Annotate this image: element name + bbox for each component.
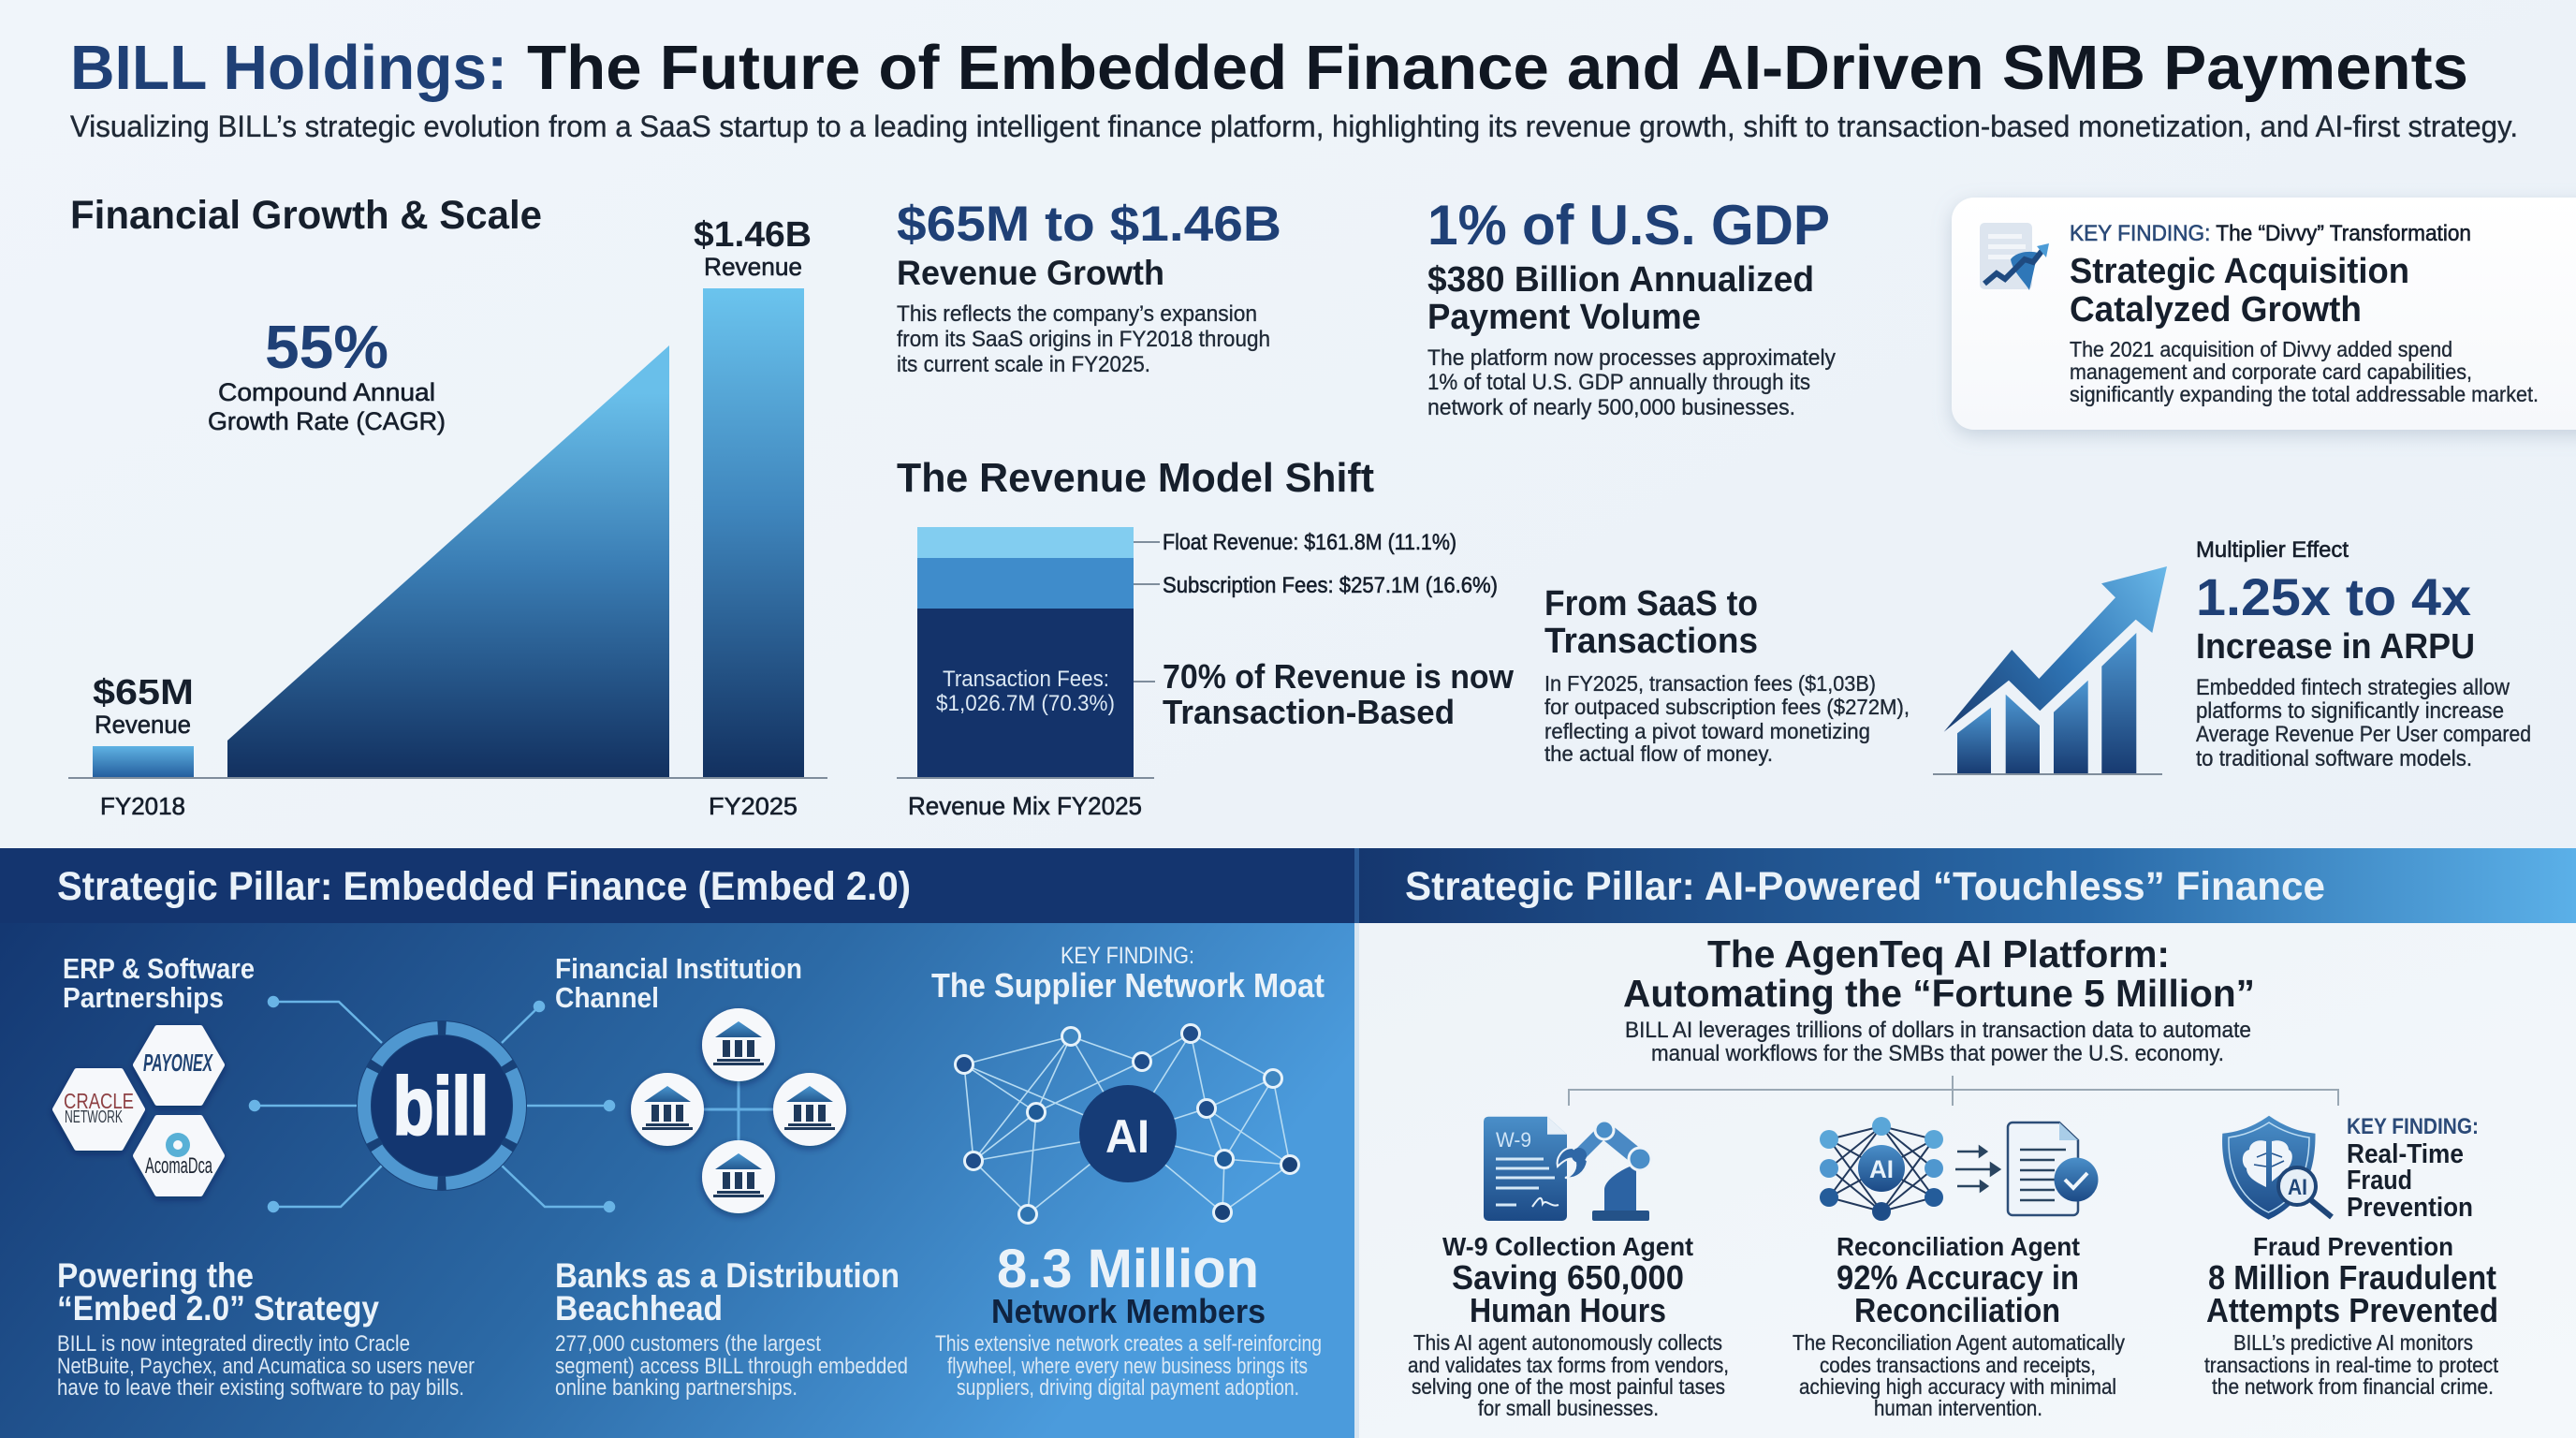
text block: Embed 2.0 strategy: “Embed 2.0” Strategy	[57, 1289, 379, 1328]
agent: W-9 collection	[1408, 1232, 1729, 1420]
panel: financial growth and scale	[68, 193, 827, 820]
icon: document with growth arrow	[1980, 223, 2049, 290]
agent: W-9 collection: and validates tax forms from vendors,	[1408, 1353, 1729, 1377]
heading: AgenTeq platform	[1623, 932, 2255, 1066]
key finding: real-time fraud: Prevention	[2347, 1193, 2473, 1223]
panel: Divvy key finding card	[1952, 198, 2576, 430]
agent: W-9 collection: for small businesses.	[1478, 1396, 1659, 1420]
agent: reconciliation	[1793, 1232, 2125, 1420]
stat: revenue growth: from its SaaS origins in FY2018 through	[897, 327, 1270, 352]
icon: rising bars with arrow	[1933, 566, 2167, 774]
icon: partner hexagons: AcomaDca	[145, 1153, 212, 1179]
label: ERP and software: ERP & Software	[63, 952, 255, 985]
text block: Embed 2.0 strategy: BILL is now integrated directly into Cracle	[57, 1331, 410, 1357]
connectors: hub lines	[250, 997, 614, 1211]
panel: Divvy key finding card: significantly expanding the total addressable market.	[2070, 382, 2539, 406]
stat: multiplier effect: 1.25x to 4x	[2196, 567, 2471, 626]
text block: from SaaS to transactions: Transactions	[1544, 622, 1758, 661]
stat: revenue growth	[897, 197, 1281, 377]
callout: CAGR	[208, 313, 446, 435]
agent: W-9 collection: selving one of the most painful tases	[1412, 1374, 1725, 1399]
callout: CAGR: Compound Annual	[218, 378, 435, 406]
panel: embedded finance pillar	[0, 848, 1359, 1438]
text block: banks as beachhead: Banks as a Distribution	[555, 1256, 900, 1295]
header: embedded finance: Strategic Pillar: Embedded Finance (Embed 2.0)	[57, 864, 911, 909]
agent: fraud prevention	[2204, 1232, 2499, 1399]
panel: Divvy key finding card: KEY FINDING: The “Divvy” Transformation	[2070, 221, 2471, 246]
text block: banks as beachhead: Beachhead	[555, 1289, 723, 1328]
agent: fraud prevention: the network from financial crime.	[2212, 1374, 2494, 1399]
agent: reconciliation: Reconciliation Agent	[1837, 1232, 2080, 1261]
stat: revenue growth: its current scale in FY2025.	[897, 352, 1150, 377]
icon: partner hexagons: CRACLE	[64, 1089, 134, 1113]
chart: supplier network graph: AI	[1105, 1110, 1149, 1163]
stat: multiplier effect: to traditional software models.	[2196, 746, 2472, 771]
stat: network members: suppliers, driving digital payment adoption.	[957, 1375, 1299, 1401]
stat: share of GDP	[1427, 194, 1836, 420]
stat: share of GDP: The platform now processes approximately	[1427, 345, 1836, 371]
text block: banks as beachhead: segment) access BILL through embedded	[555, 1354, 908, 1379]
chart: revenue growth bars: Revenue	[704, 253, 802, 281]
icon: W-9 robot arm: W-9	[1496, 1128, 1531, 1152]
chart: stacked revenue mix: $1,026.7M (70.3%)	[936, 691, 1115, 716]
icon: AI fraud shield	[2222, 1116, 2332, 1220]
text block: from SaaS to transactions: for outpaced subscription fees ($272M),	[1544, 695, 1910, 719]
panel: AI-powered finance pillar	[1359, 848, 2576, 1438]
header: AI-powered finance: Strategic Pillar: AI-Powered “Touchless” Finance	[1405, 864, 2325, 909]
heading: supplier network key finding: KEY FINDING:	[1061, 943, 1194, 969]
key finding: real-time fraud: KEY FINDING:	[2347, 1114, 2479, 1139]
connector: agent tree	[1569, 1076, 2338, 1106]
chart: stacked revenue mix: Float Revenue: $161.8M (11.1%)	[1163, 530, 1456, 555]
chart: supplier network graph	[955, 1024, 1299, 1223]
icon: bill hub	[357, 1020, 527, 1191]
text block: Embed 2.0 strategy: NetBuite, Paychex, and Acumatica so users never	[57, 1354, 475, 1379]
icon: partner hexagons: PAYONEX	[143, 1049, 213, 1077]
icon: bank network	[631, 1008, 846, 1213]
icon: AI fraud shield: AI	[2288, 1175, 2307, 1200]
header: AI-powered finance	[1359, 848, 2576, 923]
label: ERP and software	[63, 952, 255, 1014]
label: financial institution channel	[555, 952, 802, 1014]
stat: multiplier effect: Increase in ARPU	[2196, 627, 2475, 667]
label: ERP and software: Partnerships	[63, 981, 224, 1014]
stat: network members: flywheel, where every new business brings its	[947, 1354, 1308, 1379]
text block: banks as beachhead: 277,000 customers (the largest	[555, 1331, 821, 1357]
chart: revenue growth bars: FY2025	[709, 792, 798, 820]
chart: revenue growth bars	[68, 215, 827, 820]
agent: fraud prevention: 8 Million Fraudulent	[2208, 1258, 2496, 1297]
stat: multiplier effect	[2196, 537, 2531, 771]
stat: share of GDP: Payment Volume	[1427, 298, 1701, 337]
text block: from SaaS to transactions: reflecting a pivot toward monetizing	[1544, 719, 1870, 743]
icon: bill hub: bill	[393, 1062, 489, 1152]
chart: stacked revenue mix: Revenue Mix FY2025	[908, 792, 1142, 820]
stat: share of GDP: $380 Billion Annualized	[1427, 260, 1814, 300]
agent: fraud prevention: Attempts Prevented	[2206, 1291, 2498, 1329]
stat: share of GDP: network of nearly 500,000 businesses.	[1427, 395, 1795, 420]
agent: W-9 collection: W-9 Collection Agent	[1442, 1232, 1693, 1261]
heading: supplier network key finding: The Supplier Network Moat	[931, 966, 1325, 1005]
stat: revenue growth: Revenue Growth	[897, 254, 1164, 292]
panel: Divvy key finding card: The 2021 acquisition of Divvy added spend	[2070, 337, 2452, 361]
panel: Divvy key finding card: management and corporate card capabilities,	[2070, 360, 2472, 384]
chart: stacked revenue mix	[897, 527, 1515, 820]
key finding: real-time fraud: Fraud	[2347, 1166, 2412, 1196]
agent: reconciliation: codes transactions and receipts,	[1820, 1353, 2096, 1377]
stat: revenue growth: This reflects the company’s expansion	[897, 301, 1257, 327]
agent: W-9 collection: This AI agent autonomously collects	[1413, 1330, 1722, 1355]
heading: AgenTeq platform: manual workflows for the SMBs that power the U.S. economy.	[1651, 1041, 2224, 1066]
heading: revenue model shift: The Revenue Model Shift	[897, 455, 1374, 501]
stat: network members	[935, 1239, 1322, 1401]
icon: AI reconciliation: AI	[1869, 1155, 1894, 1183]
chart: stacked revenue mix: Subscription Fees: $257.1M (16.6%)	[1163, 573, 1498, 598]
chart: stacked revenue mix: Transaction Fees:	[943, 667, 1109, 692]
chart: stacked revenue mix: Transaction-Based	[1163, 693, 1455, 731]
panel: Divvy key finding card: Strategic Acquisition	[2070, 252, 2409, 291]
heading: AgenTeq platform: Automating the “Fortune 5 Million”	[1623, 972, 2255, 1015]
text block: from SaaS to transactions	[1544, 584, 1910, 766]
chart: revenue growth bars: $65M	[93, 673, 194, 712]
text block: from SaaS to transactions: From SaaS to	[1544, 584, 1758, 624]
title: BILL Holdings:	[70, 33, 507, 103]
agent: W-9 collection: Saving 650,000	[1452, 1258, 1684, 1297]
label: financial institution channel: Channel	[555, 981, 659, 1014]
icon: W-9 robot arm	[1484, 1117, 1651, 1221]
callout: CAGR: 55%	[265, 313, 388, 381]
icon: partner hexagons	[55, 1028, 222, 1194]
stat: share of GDP: 1% of U.S. GDP	[1427, 194, 1830, 257]
chart: revenue growth bars: Revenue	[95, 711, 191, 739]
stat: multiplier effect: Embedded fintech strategies allow	[2196, 675, 2510, 700]
label: financial institution channel: Financial Institution	[555, 952, 802, 985]
stat: network members: Network Members	[991, 1292, 1266, 1330]
icon: partner hexagons: NETWORK	[65, 1108, 123, 1126]
key finding: real-time fraud	[2347, 1114, 2479, 1223]
key finding: real-time fraud: Real-Time	[2347, 1139, 2464, 1169]
subtitle: Visualizing BILL’s strategic evolution from a SaaS startup to a leading intelligent finance platform, highlighting its revenue growth, shift to transaction-based monetization, and AI-first strategy.	[70, 110, 2518, 143]
text block: Embed 2.0 strategy: Powering the	[57, 1256, 254, 1295]
agent: reconciliation: human intervention.	[1874, 1396, 2042, 1420]
panel: Divvy key finding card: Catalyzed Growth	[2070, 290, 2362, 330]
heading: supplier network key finding	[931, 943, 1325, 1005]
heading: financial growth: Financial Growth & Scale	[70, 193, 542, 238]
text block: banks as beachhead: online banking partnerships.	[555, 1375, 798, 1401]
heading: AgenTeq platform: BILL AI leverages trillions of dollars in transaction data to automate	[1625, 1018, 2251, 1043]
text block: Embed 2.0 strategy	[57, 1256, 475, 1401]
title: The Future of Embedded Finance and AI-Driven SMB Payments	[527, 33, 2468, 103]
stat: network members: This extensive network creates a self-reinforcing	[935, 1331, 1322, 1357]
agent: reconciliation: The Reconciliation Agent automatically	[1793, 1330, 2125, 1355]
agent: W-9 collection: Human Hours	[1470, 1291, 1666, 1329]
stat: network members: 8.3 Million	[997, 1239, 1259, 1299]
agent: reconciliation: 92% Accuracy in	[1837, 1258, 2079, 1297]
text block: from SaaS to transactions: the actual flow of money.	[1544, 741, 1773, 766]
agent: reconciliation: Reconciliation	[1854, 1291, 2060, 1329]
stat: multiplier effect: platforms to significantly increase	[2196, 698, 2504, 724]
callout: CAGR: Growth Rate (CAGR)	[208, 407, 446, 435]
stat: multiplier effect: Average Revenue Per User compared	[2196, 722, 2531, 747]
agent: reconciliation: achieving high accuracy with minimal	[1799, 1374, 2116, 1399]
chart: revenue growth bars: FY2018	[100, 792, 185, 820]
agent: fraud prevention: BILL’s predictive AI monitors	[2233, 1330, 2473, 1355]
stat: revenue growth: $65M to $1.46B	[897, 197, 1281, 252]
header: embedded finance	[0, 848, 1359, 923]
agent: fraud prevention: Fraud Prevention	[2253, 1232, 2453, 1261]
stat: multiplier effect: Multiplier Effect	[2196, 537, 2349, 563]
text block: from SaaS to transactions: In FY2025, transaction fees ($1,03B)	[1544, 671, 1876, 696]
chart: revenue growth bars: $1.46B	[694, 215, 812, 255]
stat: share of GDP: 1% of total U.S. GDP annually through its	[1427, 370, 1810, 395]
text block: Embed 2.0 strategy: have to leave their existing software to pay bills.	[57, 1375, 464, 1401]
text block: banks as beachhead	[555, 1256, 908, 1401]
heading: AgenTeq platform: The AgenTeq AI Platform:	[1707, 932, 2170, 976]
icon: AI reconciliation	[1820, 1117, 2099, 1221]
agent: fraud prevention: transactions in real-time to protect	[2204, 1353, 2499, 1377]
chart: stacked revenue mix: 70% of Revenue is now	[1163, 657, 1515, 696]
